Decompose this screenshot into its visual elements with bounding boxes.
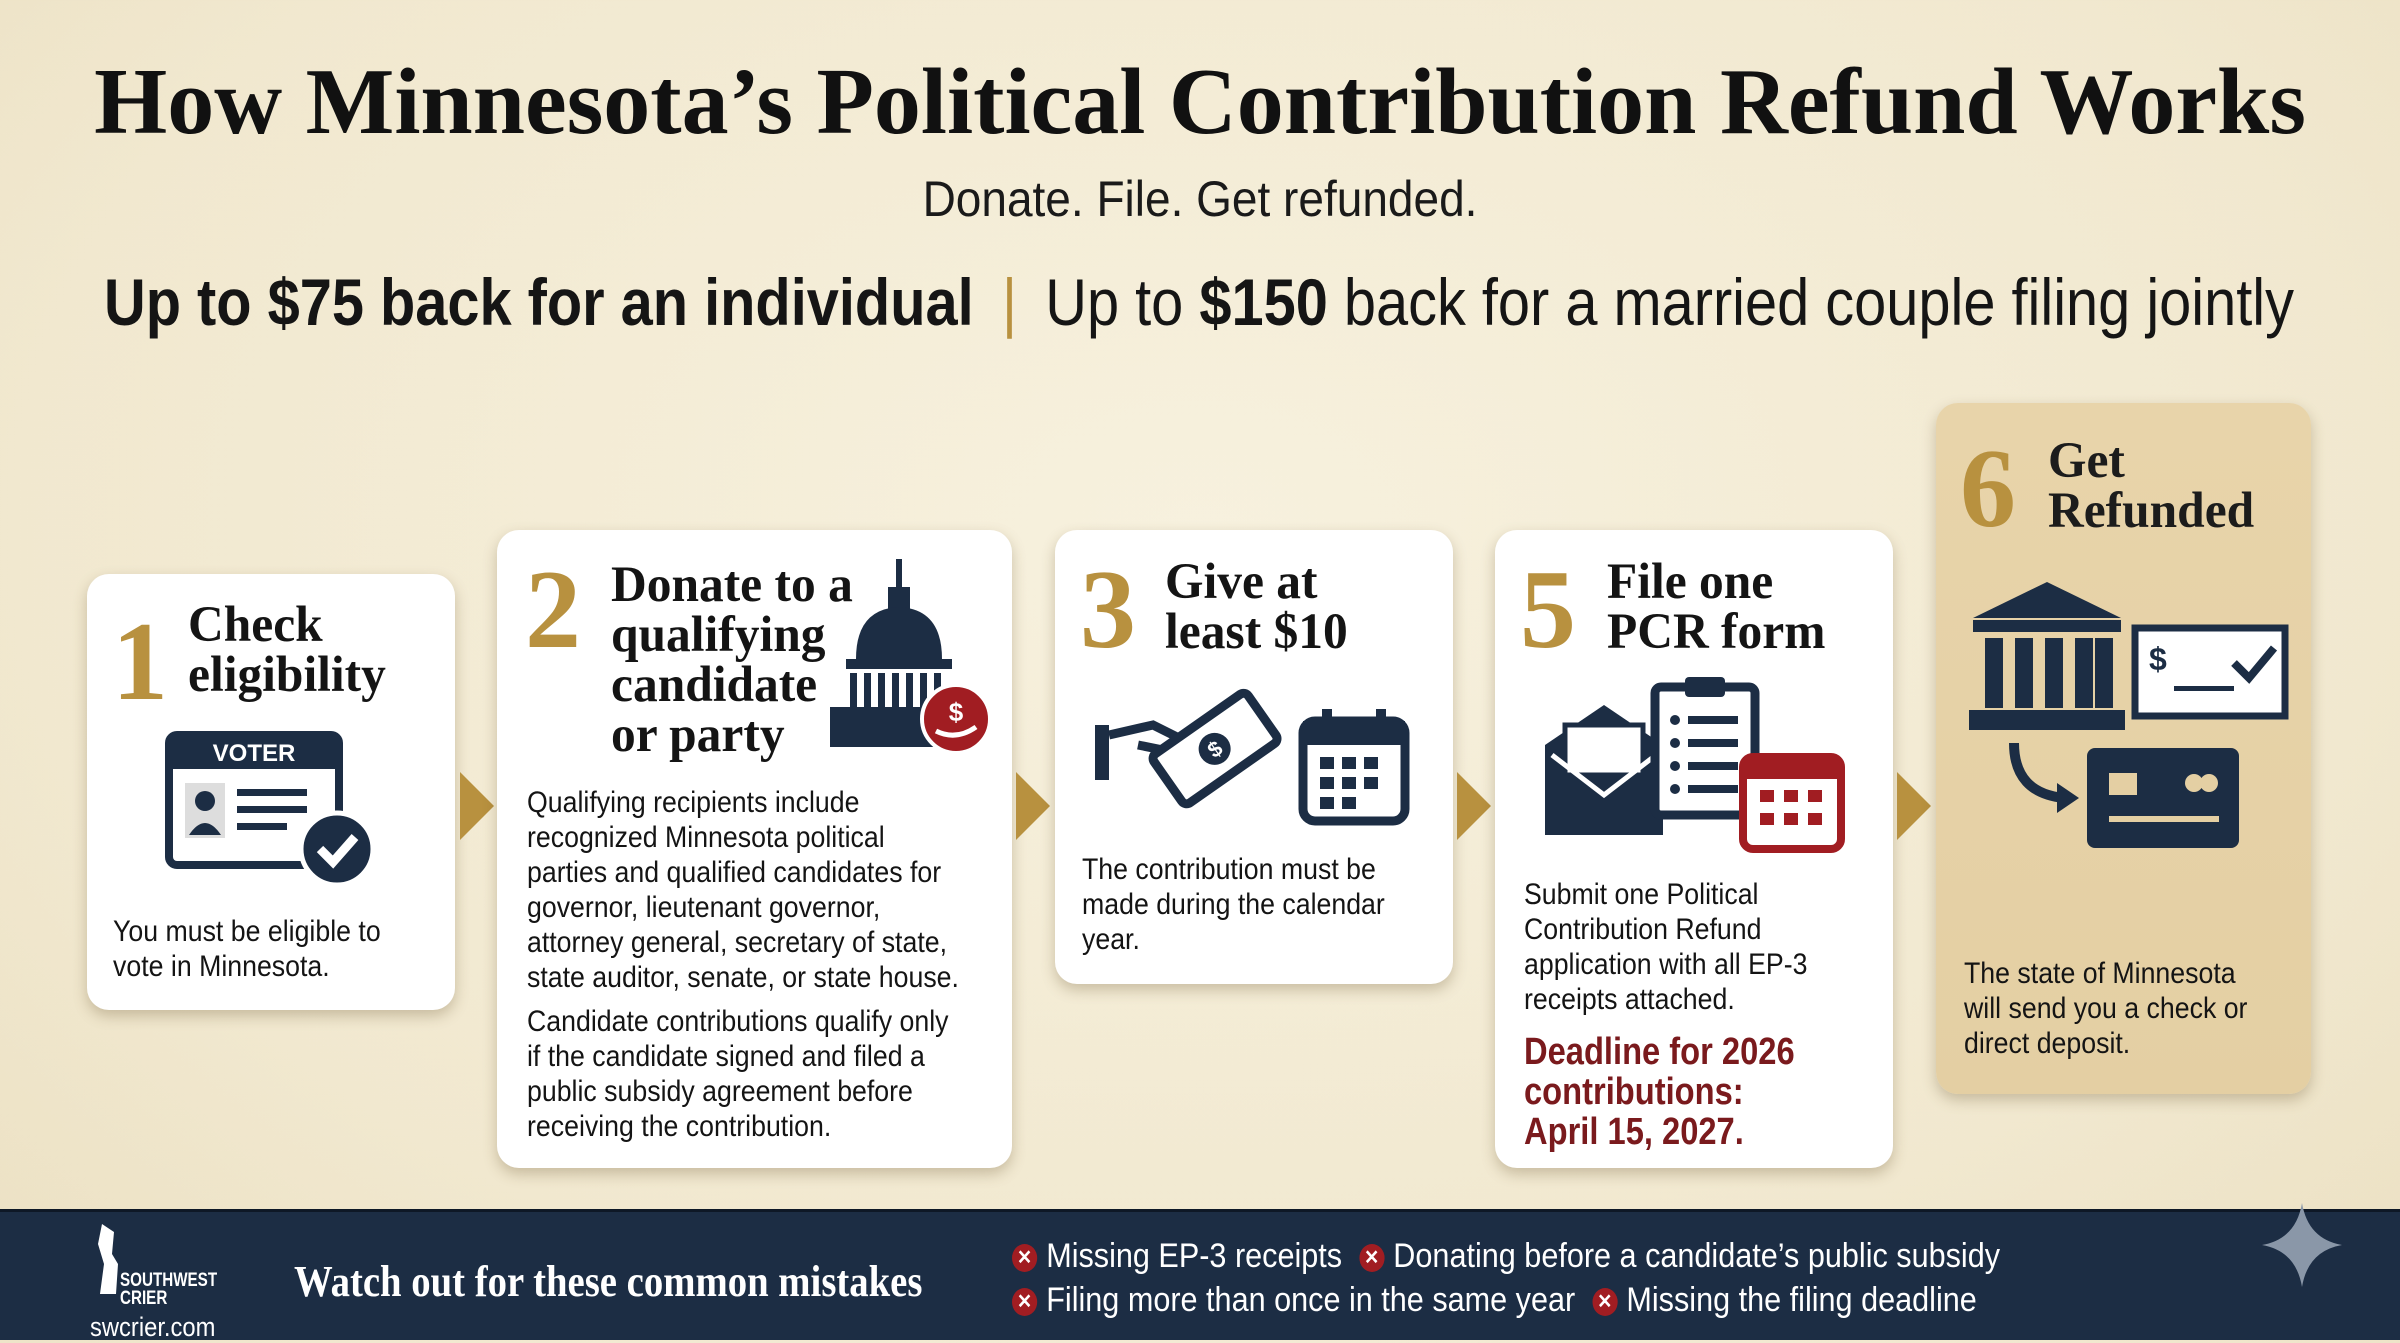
logo: swcrier.com	[90, 1312, 215, 1342]
mistakes list: Missing EP-3 receipts Donating before a candidate’s public subsidy	[1046, 1237, 2000, 1275]
text 2b: if the candidate signed and filed a	[527, 1040, 925, 1073]
text 2: attorney general, secretary of state,	[527, 926, 947, 959]
text 3	[1082, 853, 1385, 956]
text 6: direct deposit.	[1964, 1027, 2130, 1060]
mistakes list: ✕	[1597, 1291, 1612, 1313]
icon: bank, check, card: $	[2149, 641, 2167, 677]
text 2: state auditor, senate, or state house.	[527, 961, 959, 994]
text 2b: public subsidy agreement before	[527, 1075, 913, 1108]
heading 3	[1165, 554, 1348, 660]
icon: capitol with donation: $	[949, 697, 964, 727]
text 2	[527, 786, 959, 994]
heading 6: Get	[2048, 433, 2125, 489]
text 2: governor, lieutenant governor,	[527, 891, 880, 924]
deadline callout: contributions:	[1524, 1071, 1744, 1113]
logo: SOUTHWEST	[120, 1270, 217, 1291]
icon: envelope, clipboard, calendar	[1545, 677, 1845, 853]
heading 2: qualifying	[611, 607, 825, 663]
heading 2	[611, 557, 853, 763]
deadline callout: April 15, 2027.	[1524, 1111, 1744, 1153]
text 6: The state of Minnesota	[1964, 957, 2236, 990]
heading 1	[188, 597, 386, 703]
arrow 2	[1016, 772, 1050, 840]
text 1: vote in Minnesota.	[113, 950, 330, 983]
text 2b	[527, 1005, 949, 1143]
heading 2: or party	[611, 707, 785, 763]
text 5: Submit one Political	[1524, 878, 1758, 911]
deadline callout: Deadline for 2026	[1524, 1031, 1795, 1073]
title: How Minnesota’s Political Contribution Refund Works	[94, 50, 2306, 154]
icon: capitol with donation	[830, 559, 988, 751]
heading 5: File one	[1607, 554, 1773, 610]
heading 2: Donate to a	[611, 557, 853, 613]
text 2b: receiving the contribution.	[527, 1110, 831, 1143]
arrow 1	[460, 772, 494, 840]
logo	[90, 1224, 217, 1342]
heading 5	[1607, 554, 1825, 660]
card 3: give at least $10	[1055, 530, 1453, 984]
card 6: get refunded	[1936, 403, 2311, 1094]
subtitle: Donate. File. Get refunded.	[923, 171, 1477, 227]
text 2: Qualifying recipients include	[527, 786, 859, 819]
number 6: 6	[1960, 427, 2016, 551]
text 2b: Candidate contributions qualify only	[527, 1005, 949, 1038]
number 1: 1	[112, 600, 168, 724]
card 2: donate	[497, 530, 1012, 1168]
text 3: The contribution must be	[1082, 853, 1376, 886]
icon: hand with money: $	[1203, 736, 1227, 763]
refund amounts line: Up to $75 back for an individual | Up to $150 back for a married couple filing jointly	[104, 265, 2294, 339]
icon: sparkle star	[2262, 1203, 2342, 1287]
text 1: You must be eligible to	[113, 915, 381, 948]
number 2: 2	[525, 548, 581, 672]
text 5	[1524, 878, 1807, 1016]
footer bar	[0, 1209, 2400, 1340]
heading 3: least $10	[1165, 604, 1348, 660]
text 5: Contribution Refund	[1524, 913, 1761, 946]
heading 6	[2048, 433, 2254, 539]
number 5: 5	[1520, 548, 1576, 672]
number 3: 3	[1080, 548, 1136, 672]
mistakes list: Filing more than once in the same year Missing the filing deadline	[1046, 1281, 1977, 1319]
mistakes list: ✕	[1017, 1247, 1032, 1269]
heading 2: candidate	[611, 657, 817, 713]
arrow 4	[1897, 772, 1931, 840]
heading 3: Give at	[1165, 554, 1318, 610]
icon: hand with money	[1095, 688, 1282, 808]
text 6	[1964, 957, 2247, 1060]
text 2: recognized Minnesota political	[527, 821, 885, 854]
mistakes list: ✕	[1017, 1291, 1032, 1313]
text 5: application with all EP-3	[1524, 948, 1807, 981]
heading 5: PCR form	[1607, 604, 1825, 660]
icon: voter card	[165, 731, 370, 882]
heading 1: eligibility	[188, 647, 386, 703]
text 2: parties and qualified candidates for	[527, 856, 941, 889]
icon: bank, check, card	[1969, 582, 2288, 848]
text 3: year.	[1082, 923, 1140, 956]
text 3: made during the calendar	[1082, 888, 1385, 921]
icon: calendar	[1298, 709, 1410, 826]
card 5: file PCR form	[1495, 530, 1893, 1168]
deadline callout	[1524, 1031, 1795, 1153]
mistakes list	[1012, 1237, 2000, 1319]
heading 1: Check	[188, 597, 323, 653]
text 6: will send you a check or	[1964, 992, 2247, 1025]
mistakes list: ✕	[1364, 1247, 1379, 1269]
arrow 3	[1457, 772, 1491, 840]
text 1	[113, 915, 381, 983]
footer heading: Watch out for these common mistakes	[294, 1257, 922, 1306]
heading 6: Refunded	[2048, 483, 2254, 539]
icon: voter card: VOTER	[213, 740, 295, 767]
logo: CRIER	[120, 1288, 167, 1309]
card 1: check eligibility	[87, 574, 455, 1010]
text 5: receipts attached.	[1524, 983, 1735, 1016]
